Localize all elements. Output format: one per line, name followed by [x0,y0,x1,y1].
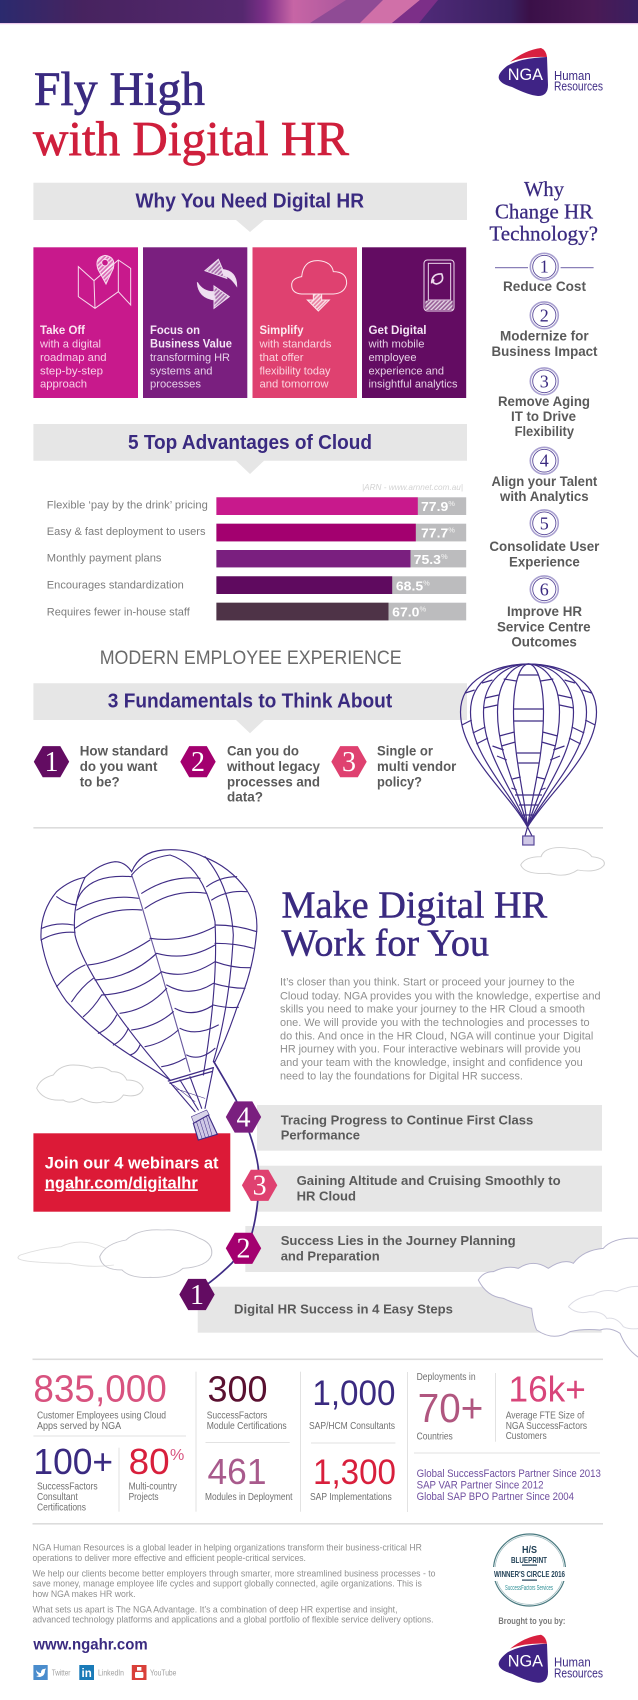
bar: pay by the drink: % [448,501,456,508]
cloud: top right [521,848,604,875]
panel: Simplify [252,247,357,398]
social: YouTube: YouTube [150,1669,177,1678]
heading banner: Why You Need Digital HR [33,183,467,232]
stat: 835,000 employees [33,1369,167,1432]
bar: fewer staff: % [419,607,427,614]
social: Twitter: Twitter [52,1669,71,1678]
bar: fewer staff [47,603,466,620]
bar: standardization [47,576,466,594]
item 5: Consolidate User Experience [489,510,600,569]
body text: journey intro: skills you need to make your journey to the HR Cloud a smooth [280,1004,585,1016]
item 4: Align your Talent with Analytics: with Analytics [499,489,589,504]
step bar 4: Tracing Progress to Continue First Class [281,1112,533,1127]
stat: 70+ countries [417,1372,483,1442]
callout: join webinars: Join our 4 webinars at [45,1153,219,1172]
item 3: Remove Aging IT to Drive Flexibility: Remove Aging [498,394,590,409]
fundamental 2: without legacy [226,759,320,774]
fundamental 2: 2 [191,747,205,778]
badge: HfS Blueprint Winner's Circle 2016: SuccessFactors Services [505,1583,553,1592]
panel: Take Off: approach [40,379,87,391]
step bar 4 [257,1105,602,1151]
fundamental 2: processes and [227,774,320,789]
item 4: Align your Talent with Analytics: Align your Talent [492,474,598,489]
stat: 300 certifications: SuccessFactors [207,1411,267,1422]
stat: 300 certifications [207,1369,287,1432]
item 2: Modernize for Business Impact: Business Impact [492,344,598,359]
sidebar heading: Why [524,177,564,201]
footer company description: operations to deliver more effective and efficient people-critical services. [32,1553,306,1563]
stat: 16k+ FTE [506,1369,587,1442]
item 5: Consolidate User Experience: Experience [509,554,580,569]
step bar 3: HR Cloud [297,1188,356,1203]
bar: fewer staff: Requires fewer in-house staff [47,606,191,618]
logo: NGA Human Resources footer: Human [554,1655,591,1670]
fundamental 1 [34,744,168,789]
step hexagon 3: 3 [253,1171,267,1202]
item 2: Modernize for Business Impact: 2 [540,305,549,325]
panel: Get Digital: with mobile [367,339,424,351]
footer company description: save money, manage employee life cycles and support globally connected, agile organizations. This is [32,1579,422,1589]
sidebar heading [489,177,598,246]
item 2: Modernize for Business Impact [492,302,598,359]
stat: 461 modules: 461 [208,1451,266,1492]
bar chart: advantages of cloud [47,482,466,620]
step hexagon 1: 1 [190,1280,204,1311]
badge: HfS Blueprint Winner's Circle 2016: BLUEPRINT [511,1555,548,1565]
panel: Get Digital: insightful analytics [368,379,458,391]
social: LinkedIn: LinkedIn [98,1669,124,1678]
icon: refresh arrows [197,259,237,308]
panel: Get Digital: experience and [368,365,444,377]
bar: monthly payment plans [47,550,466,567]
panel: Focus on Business Value: Business Value [150,338,233,351]
item 1: Reduce Cost: 1 [540,257,549,277]
item 3: Remove Aging IT to Drive Flexibility: Flexibility [515,424,574,439]
item 5: Consolidate User Experience: 5 [540,513,549,533]
step hexagon 2 [226,1233,261,1265]
step hexagon 4 [226,1101,261,1133]
panel: Focus on Business Value: transforming HR [150,352,230,364]
bar: pay by the drink: 77.9 [421,499,446,514]
logo: NGA Human Resources: Resources [554,79,603,94]
stat: 70+ countries: 70+ [418,1385,483,1431]
stat: 461 modules: Modules in Deployment [205,1492,293,1503]
panel: Focus on Business Value [143,247,247,398]
panel: Focus on Business Value: systems and [150,365,212,377]
source note: |ARN - www.arnnet.com.au| [362,482,463,492]
body text: journey intro: need to lay the foundations for Digital HR success. [280,1071,523,1083]
footer company description: NGA Human Resources is a global leader in helping organizations transform their business-critical HR [32,1543,422,1553]
logo: NGA Human Resources: Human [554,68,591,83]
panel: Simplify: that offer [260,352,304,364]
item 1: Reduce Cost [495,253,594,294]
body text: journey intro: one. We will provide you with the technologies and processes to [280,1017,590,1029]
item 6: Improve HR Service Centre Outcomes: Outcomes [511,635,577,650]
panel: Simplify: Simplify [260,324,304,337]
stat: 80% multi-country: Multi-country [129,1482,178,1493]
step hexagon 2: 2 [236,1234,250,1265]
sidebar heading: Change HR [495,199,593,223]
item 6: Improve HR Service Centre Outcomes: Improve HR [507,604,582,619]
badge: HfS Blueprint Winner's Circle 2016: WINNER'S CIRCLE 2016 [494,1570,565,1579]
item 4: Align your Talent with Analytics [492,447,598,504]
heading: Make Digital HR Work for You: Work for You [282,923,489,965]
step bar 2: Success Lies in the Journey Planning [281,1233,516,1248]
fundamental 3 [331,744,457,789]
panel: Simplify: with standards [259,339,332,351]
body text: journey intro: HR journey with you. Four interactive webinars will provide you [280,1044,581,1056]
panel: Focus on Business Value: Focus on [150,324,200,337]
fundamental 2 [180,744,320,805]
stat: 1,300 implementations: 1,300 [313,1453,396,1492]
panel: Get Digital: employee [368,352,416,364]
partner credentials: Global SuccessFactors Partner Since 2013 [417,1468,601,1480]
logo: NGA Human Resources footer: NGA [508,1653,543,1671]
bar: standardization: % [423,581,431,588]
panel: Get Digital: Get Digital [368,324,426,337]
panel: Take Off [33,247,138,398]
badge: HfS Blueprint Winner's Circle 2016: H/S [522,1545,537,1556]
stat: 16k+ FTE: NGA SuccessFactors [506,1421,587,1432]
fundamental 1: 1 [44,747,58,778]
item 6: Improve HR Service Centre Outcomes: 6 [540,579,549,599]
stat: 70+ countries: Countries [417,1431,453,1442]
stat: 835,000 employees: Customer Employees using Cloud [37,1411,166,1422]
stat: 100+ certifications: Consultant [37,1492,78,1503]
bar: monthly payment plans: 75.3 [414,552,439,567]
sidebar heading: Technology? [489,222,598,246]
item 1: Reduce Cost: Reduce Cost [503,279,586,294]
stat: 100+ certifications [33,1441,113,1513]
step hexagon 1 [179,1279,215,1311]
sidebar: Why Change HR Technology [489,177,600,650]
panel: Take Off: with a digital [39,339,101,351]
bar: pay by the drink [47,497,466,515]
illustration: upright hot air balloon [460,664,596,845]
panel: Focus on Business Value: processes [150,379,201,391]
social: Twitter [33,1665,71,1680]
bar: monthly payment plans: Monthly payment plans [47,553,162,565]
logo: NGA Human Resources: NGA [508,66,543,84]
step bar 2: and Preparation [281,1248,380,1263]
logo: NGA Human Resources footer: Resources [554,1665,603,1680]
stat: 70+ countries: Deployments in [417,1372,476,1383]
partner credentials: SAP VAR Partner Since 2012 [417,1479,544,1491]
panel: Take Off: step-by-step [40,365,103,377]
fundamental 1: do you want [80,759,158,774]
body text: journey intro: and your team with the knowledge, insight and confidence you [280,1057,583,1069]
cloud: large lower right [478,1238,638,1358]
stat: 100+ certifications: 100+ [33,1441,113,1482]
website link: www.ngahr.com [32,1636,148,1653]
body text: journey intro: do this. And once in the HR Cloud, NGA will continue your Digital [280,1030,593,1042]
fundamental 1: to be? [80,774,120,789]
step bar 1: Digital HR Success in 4 Easy Steps [234,1302,453,1317]
badge: HfS Blueprint Winner's Circle 2016 [492,1534,567,1606]
top gradient band [0,0,638,24]
panel: Take Off: Take Off [40,324,85,337]
bar: pay by the drink: Flexible ‘pay by the drink’ pricing [47,499,208,511]
bar: fast deployment: % [448,528,456,534]
stat: 16k+ FTE: Average FTE Size of [506,1411,584,1422]
heading banner: Why You Need Digital HR: Why You Need Digital HR [136,191,365,213]
partner credentials: Global SAP BPO Partner Since 2004 [417,1491,574,1503]
social: LinkedIn [79,1665,124,1680]
logo: NGA Human Resources [499,48,603,96]
item 3: Remove Aging IT to Drive Flexibility: 3 [540,371,549,391]
icon: cloud with download arrow [292,261,347,311]
fundamental 3: 3 [342,747,356,778]
cloud: lower left [18,1230,212,1277]
footer company description: What sets us apart is The NGA Advantage. It’s a combination of deep HR expertise and insight, [32,1604,398,1614]
icon: smartphone [424,260,454,311]
stat: 100+ certifications: Certifications [37,1502,86,1513]
bar: fast deployment [47,524,466,541]
partner credentials [417,1468,601,1503]
body text: journey intro [280,977,601,1083]
heading: Make Digital HR Work for You: Make Digital HR [282,884,548,926]
logo: NGA Human Resources footer [499,1635,603,1683]
fundamental 1: How standard [80,744,168,759]
panel: Get Digital [362,247,466,398]
bar: standardization: Encourages standardization [47,580,184,592]
step hexagon 3 [242,1170,277,1202]
item 5: Consolidate User Experience: Consolidate User [489,539,600,554]
heading banner: 5 Top Advantages of Cloud [33,424,467,474]
stat: 16k+ FTE: 16k+ [508,1369,586,1410]
fundamental 2: Can you do [227,744,299,759]
callout: join webinars: ngahr.com/digitalhr [45,1173,198,1192]
bar: monthly payment plans: % [441,554,449,561]
heading banner: 5 Top Advantages of Cloud: 5 Top Advantages of Cloud [128,432,372,454]
stat: 80% multi-country: 80 [129,1441,170,1482]
journey path line [205,1061,259,1286]
step bar 2 [245,1226,602,1272]
fundamental 3: Single or [377,744,434,759]
footer company description [32,1543,436,1624]
stat: 1,000 consultants: SAP/HCM Consultants [309,1421,395,1432]
step bar 3 [257,1166,602,1212]
title: with Digital HR [33,111,349,166]
step bar 3: Gaining Altitude and Cruising Smoothly to [297,1173,561,1188]
body text: journey intro: It’s closer than you think. Start or proceed your journey to the [280,977,575,989]
item 6: Improve HR Service Centre Outcomes [497,576,591,650]
brought to you by: Brought to you by: [498,1616,565,1626]
heading: Make Digital HR Work for You [282,884,548,965]
bar: fast deployment: 77.7 [421,526,446,540]
title: Fly High [34,63,205,116]
fundamental 3: policy? [377,774,422,789]
fundamental 2: data? [227,790,263,805]
subheading: Modern Employee Experience: MODERN EMPLOYEE EXPERIENCE [100,647,402,669]
panel: Simplify: and tomorrow [260,379,329,391]
title [33,63,349,166]
panel: Take Off: roadmap and [40,352,106,364]
stat: 1,300 implementations: SAP Implementations [310,1492,392,1503]
stat: 16k+ FTE: Customers [506,1431,547,1442]
stat: 300 certifications: 300 [208,1369,268,1410]
item 4: Align your Talent with Analytics: 4 [540,451,549,471]
stat: 835,000 employees: Apps served by NGA [37,1421,121,1432]
item 6: Improve HR Service Centre Outcomes: Service Centre [497,619,591,634]
social: LinkedIn: in [82,1668,92,1680]
stat: 100+ certifications: SuccessFactors [37,1482,98,1493]
step bar 1 [198,1287,602,1333]
social: YouTube [132,1665,177,1680]
step bar 4: Performance [281,1128,360,1143]
item 3: Remove Aging IT to Drive Flexibility [498,368,590,439]
item 3: Remove Aging IT to Drive Flexibility: IT to Drive [511,409,576,424]
panel: Simplify: flexibility today [260,365,331,377]
bar: fast deployment: Easy & fast deployment to users [47,526,206,538]
bar: standardization: 68.5 [396,579,421,594]
illustration: tilted hot air balloon [41,850,257,1140]
fundamental 3: multi vendor [377,759,457,774]
item 2: Modernize for Business Impact: Modernize for [500,328,589,343]
bar: fewer staff: 67.0 [392,605,418,620]
callout: join webinars [33,1133,230,1212]
heading banner: 3 Fundamentals to Think About: 3 Fundamentals to Think About [108,691,393,713]
heading banner: 3 Fundamentals to Think About [33,683,467,733]
stat: 80% multi-country: % [170,1447,184,1464]
footer company description: advanced technology platforms and applications and a global portfolio of flexible service delivery options. [32,1614,434,1624]
stat: 835,000 employees: 835,000 [33,1369,167,1411]
stat: 80% multi-country [129,1441,184,1503]
footer company description: We help our clients become better employers through smarter, more streamlined business processes - to [32,1568,436,1578]
stat: 461 modules [205,1451,293,1503]
step hexagon 4: 4 [236,1102,250,1133]
stat: 80% multi-country: Projects [129,1492,159,1503]
stat: 1,000 consultants: 1,000 [312,1374,395,1413]
footer company description: how NGA makes HR work. [32,1589,136,1599]
icon: map with pin [78,255,131,308]
body text: journey intro: Cloud today. NGA provides you with the knowledge, expertise and [280,990,601,1002]
stat: 1,000 consultants [309,1374,395,1432]
stat: 300 certifications: Module Certifications [207,1421,287,1432]
cloud: left [37,1065,143,1103]
